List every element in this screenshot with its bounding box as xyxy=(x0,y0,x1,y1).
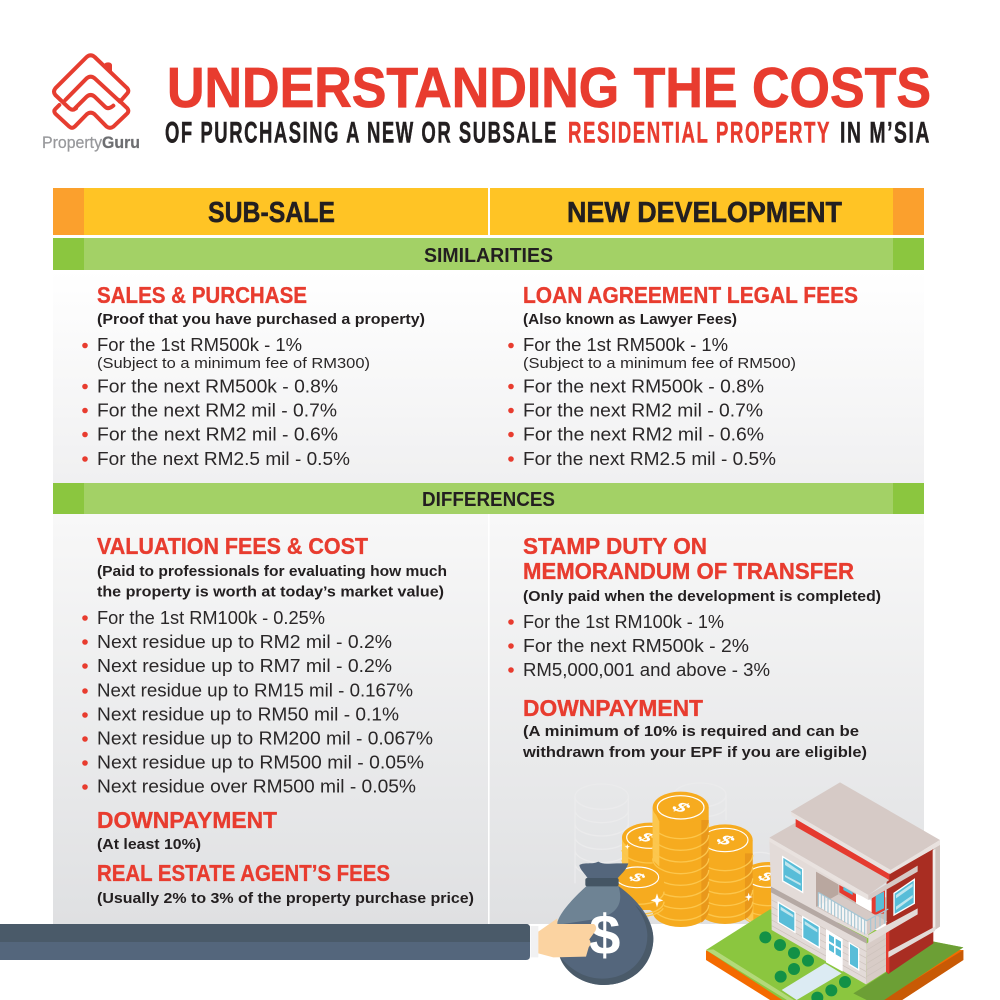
icon: house chevrons xyxy=(54,55,128,128)
heading: new development: NEW DEVELOPMENT xyxy=(567,197,842,229)
panel: valuation fees and cost: the property is worth at today’s market value) xyxy=(97,584,444,600)
illustration: money bag xyxy=(556,862,653,985)
band: similarities xyxy=(53,238,924,270)
panel: stamp duty on memorandum of transfer: RM5,000,001 and above - 3% xyxy=(523,659,770,680)
subtitle: IN M’SIA xyxy=(840,116,931,150)
coin stack back left: $ xyxy=(631,830,661,845)
panel: valuation fees and cost: Next residue up to RM50 mil - 0.1% xyxy=(97,704,399,724)
panel: valuation fees and cost: Next residue up to RM7 mil - 0.2% xyxy=(97,655,392,676)
panel: loan agreement legal fees: For the next RM500k - 0.8% xyxy=(523,376,764,396)
coin stack front left xyxy=(614,865,664,917)
panel: valuation fees and cost: For the 1st RM100k - 0.25% xyxy=(97,607,325,628)
roof slabs xyxy=(769,782,940,958)
coin stack center xyxy=(653,792,709,927)
subtitle: RESIDENTIAL PROPERTY xyxy=(568,116,831,150)
panel: new development downpayment xyxy=(522,695,867,761)
sleeve xyxy=(0,924,530,960)
coin stack center: $ xyxy=(665,800,697,816)
logo wordmark: PropertyGuru xyxy=(42,133,140,152)
coin stack far right: $ xyxy=(751,870,781,884)
header bar: column titles xyxy=(53,188,924,235)
panel: sales and purchase xyxy=(82,282,425,469)
bushes xyxy=(759,931,851,1000)
panel: sub-sale downpayment xyxy=(97,807,277,853)
panel: loan agreement legal fees: For the next RM2 mil - 0.7% xyxy=(523,400,763,420)
panel: loan agreement legal fees: For the 1st RM500k - 1% xyxy=(523,334,728,355)
sparkles xyxy=(625,844,753,907)
walls xyxy=(769,840,940,984)
coin stack far right xyxy=(742,862,795,926)
windows xyxy=(778,857,914,970)
door xyxy=(826,929,843,972)
coin stack front left: $ xyxy=(623,870,652,885)
panel: valuation fees and cost xyxy=(82,533,447,796)
panel: stamp duty on memorandum of transfer xyxy=(508,533,881,680)
panel: sub-sale downpayment: DOWNPAYMENT xyxy=(97,807,277,833)
panel: sales and purchase: SALES & PURCHASE xyxy=(97,282,307,308)
illustration: gold coin stacks xyxy=(614,792,795,927)
coin stack back right: $ xyxy=(710,832,741,848)
panel: valuation fees and cost: Next residue up to RM2 mil - 0.2% xyxy=(97,631,392,652)
panel: sales and purchase: For the 1st RM500k - 1% xyxy=(97,334,302,355)
panel: loan agreement legal fees: For the next RM2 mil - 0.6% xyxy=(523,424,764,444)
illustration: house on green lot xyxy=(706,909,963,1000)
panel: valuation fees and cost: VALUATION FEES & COST xyxy=(97,533,368,559)
coin stack back right xyxy=(697,824,753,924)
panel: stamp duty on memorandum of transfer: MEMORANDUM OF TRANSFER xyxy=(523,558,854,584)
illustration: house building xyxy=(759,782,940,1000)
panel: loan agreement legal fees xyxy=(508,282,858,469)
panel: valuation fees and cost: Next residue up to RM500 mil - 0.05% xyxy=(97,752,424,772)
band: differences: DIFFERENCES xyxy=(422,489,555,511)
title: UNDERSTANDING THE COSTS xyxy=(167,56,931,119)
hand xyxy=(531,918,596,957)
illustration: ghost coin stacks xyxy=(575,783,770,883)
panel: sub-sale downpayment: (At least 10%) xyxy=(97,837,201,853)
panel: valuation fees and cost: Next residue up to RM15 mil - 0.167% xyxy=(97,680,413,700)
panel: stamp duty on memorandum of transfer: For the next RM500k - 2% xyxy=(523,635,749,656)
panel: real estate agent's fees: REAL ESTATE AGENT’S FEES xyxy=(97,860,390,886)
panel: new development downpayment: DOWNPAYMENT xyxy=(523,695,703,721)
panel: sales and purchase: For the next RM2 mil - 0.6% xyxy=(97,424,338,444)
panel: similarities background xyxy=(53,270,924,483)
window glints xyxy=(781,861,913,932)
panel: valuation fees and cost: Next residue up to RM200 mil - 0.067% xyxy=(97,728,433,748)
illustration: money bag: $ xyxy=(589,904,620,967)
panel: loan agreement legal fees: LOAN AGREEMENT LEGAL FEES xyxy=(523,282,858,308)
panel: valuation fees and cost: Next residue over RM500 mil - 0.05% xyxy=(97,776,416,796)
band: differences xyxy=(53,483,924,514)
logo: PropertyGuru xyxy=(42,55,140,152)
coin stack back left xyxy=(622,823,678,893)
panel: loan agreement legal fees: For the next RM2.5 mil - 0.5% xyxy=(523,448,776,469)
panel: stamp duty on memorandum of transfer: (Only paid when the development is completed) xyxy=(523,589,881,605)
panel: valuation fees and cost: (Paid to professionals for evaluating how much xyxy=(97,564,447,580)
lot xyxy=(706,909,963,1000)
panel: stamp duty on memorandum of transfer: For the 1st RM100k - 1% xyxy=(523,611,724,632)
panel: sales and purchase: For the next RM2 mil - 0.7% xyxy=(97,400,337,420)
panel: differences background xyxy=(53,514,924,924)
panel: loan agreement legal fees: (Also known as Lawyer Fees) xyxy=(523,312,737,328)
panel: loan agreement legal fees: (Subject to a minimum fee of RM500) xyxy=(523,356,796,372)
panel: sales and purchase: For the next RM500k - 0.8% xyxy=(97,376,338,396)
panel: new development downpayment: withdrawn from your EPF if you are eligible) xyxy=(522,745,867,761)
panel: real estate agent's fees xyxy=(97,860,474,907)
panel: sales and purchase: (Proof that you have purchased a property) xyxy=(97,312,425,328)
subtitle: OF PURCHASING A NEW OR SUBSALE xyxy=(165,116,558,150)
band: similarities: SIMILARITIES xyxy=(424,245,553,267)
balcony xyxy=(816,872,888,934)
panel: stamp duty on memorandum of transfer: STAMP DUTY ON xyxy=(523,533,707,559)
panel: real estate agent's fees: (Usually 2% to 3% of the property purchase price) xyxy=(97,891,474,907)
panel: sales and purchase: (Subject to a minimum fee of RM300) xyxy=(97,356,370,372)
heading: sub-sale: SUB-SALE xyxy=(208,197,335,229)
panel: new development downpayment: (A minimum of 10% is required and can be xyxy=(523,724,859,740)
panel: sales and purchase: For the next RM2.5 mil - 0.5% xyxy=(97,448,350,469)
